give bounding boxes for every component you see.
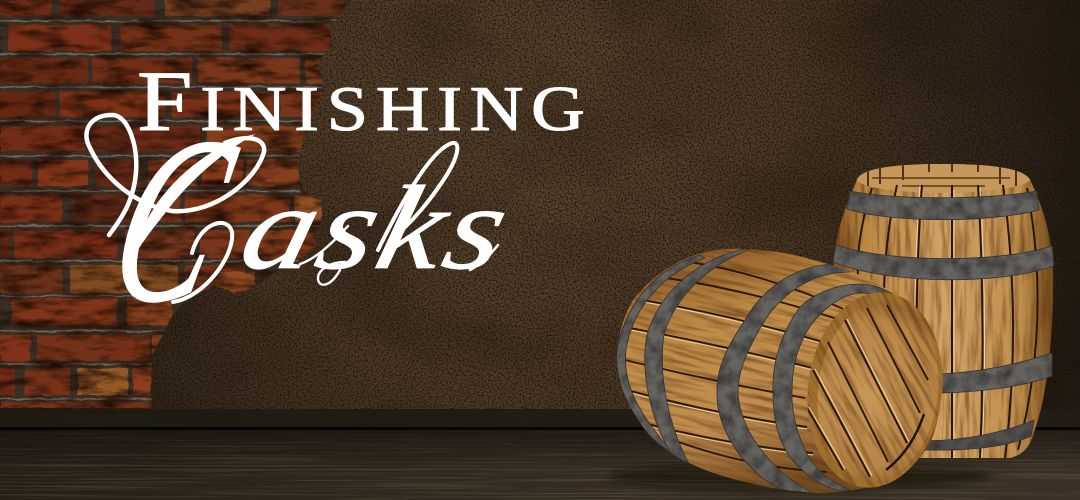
barrel opening bbox=[855, 163, 1031, 193]
title line: Casks: asks bbox=[229, 162, 525, 295]
barrel shadow on floor bbox=[610, 462, 990, 490]
upright barrel bbox=[825, 160, 1060, 460]
iron hoops on lying barrel bbox=[617, 249, 893, 492]
body bbox=[610, 245, 950, 495]
decorative swashes of the script capital and ascender bbox=[86, 115, 498, 302]
staves bbox=[625, 262, 850, 472]
title line: Finishing: FINISHING bbox=[137, 54, 585, 149]
title bbox=[86, 54, 585, 352]
barrel head bbox=[808, 292, 942, 488]
iron hoops on upright barrel bbox=[833, 191, 1054, 450]
title line: Casks bbox=[86, 88, 525, 352]
brick wall patch bbox=[0, 0, 360, 410]
lying barrel bbox=[610, 245, 953, 495]
floor: wooden shelf and planks bbox=[0, 409, 1080, 500]
title line: Casks: C bbox=[90, 88, 256, 352]
vertical staves bbox=[858, 185, 1038, 460]
